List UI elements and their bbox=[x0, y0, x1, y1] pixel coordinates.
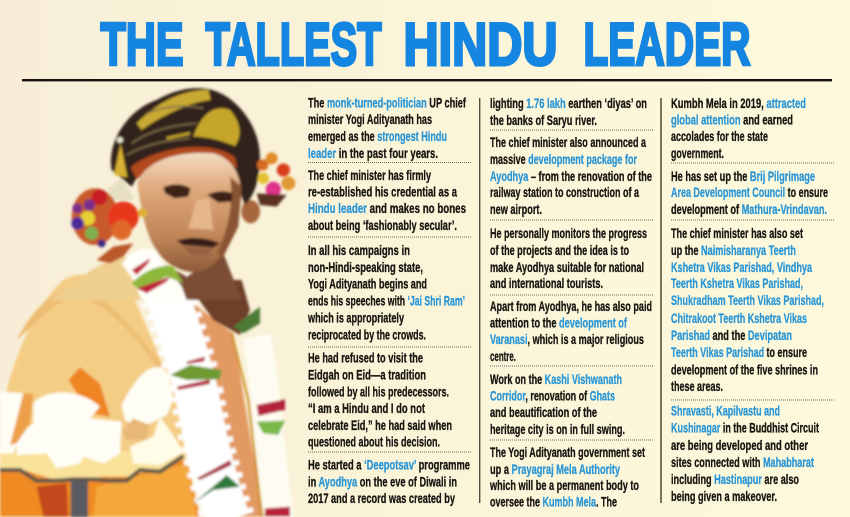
paragraph: Teerth Vikas Parishads: up the Naimisharanya Teerth bbox=[671, 243, 796, 258]
column dividers bbox=[479, 98, 662, 503]
brows and eyes bbox=[163, 184, 191, 198]
paragraph: Varanasi bbox=[490, 299, 652, 364]
paragraph: Jai Shri Ram: ends his speeches with ‘Jai Shri Ram’ bbox=[308, 294, 465, 308]
title: TALLEST bbox=[206, 11, 382, 78]
text column 2 bbox=[489, 96, 654, 510]
paragraph: Jai Shri Ram: Yogi Adityanath begins and bbox=[308, 276, 427, 292]
paragraph: development package: new airport. bbox=[490, 202, 542, 217]
face bbox=[137, 153, 241, 272]
paragraph: development package: Ayodhya – from the renovation of the bbox=[490, 169, 652, 184]
shoulder bbox=[50, 257, 187, 300]
paragraph: Eidgah on Eid: celebrate Eid,” he had said when bbox=[308, 418, 452, 433]
paragraph: Varanasi: Varanasi, which is a major religious bbox=[490, 332, 644, 347]
paragraph: Brij Pilgrimage council bbox=[671, 169, 828, 217]
photo: Yogi Adityanath in saffron robes with garlands and lamps bbox=[0, 88, 295, 517]
right garland bbox=[257, 337, 280, 517]
paragraph: Deepotsav programme: in Ayodhya on the eve of Diwali in bbox=[308, 474, 457, 490]
turban bbox=[111, 88, 260, 205]
paragraph: monitors progress: He personally monitors the progress bbox=[490, 226, 647, 241]
turban band bbox=[131, 147, 237, 179]
title: LEADER bbox=[584, 11, 750, 78]
paragraph: Teerth Vikas Parishads: these areas. bbox=[671, 379, 723, 394]
neck bbox=[147, 240, 242, 300]
paragraph: Varanasi: Apart from Ayodhya, he has also paid bbox=[490, 299, 652, 314]
paragraph: Eidgah on Eid: questioned about his decision. bbox=[308, 434, 440, 450]
left pompom cluster bbox=[108, 178, 135, 200]
title: THE bbox=[100, 11, 184, 78]
paragraph: Jai Shri Ram: non-Hindi-speaking state, bbox=[308, 260, 423, 275]
paragraph: Varanasi: centre. bbox=[490, 349, 516, 364]
paragraph: Buddhist Circuit: including Hastinapur are also bbox=[671, 472, 799, 487]
lamp tray bbox=[0, 450, 183, 480]
paragraph: strongest Hindu leader bbox=[308, 96, 466, 161]
paragraph: credential as a Hindu leader: about being ‘fashionably secular’. bbox=[308, 218, 457, 233]
paragraph: Kumbh Mela 2019 bbox=[671, 96, 806, 161]
lower robe and garlands bbox=[0, 275, 290, 517]
paragraph: Deepotsav programme: 2017 and a record was created by bbox=[308, 491, 455, 506]
paragraph: Varanasi: attention to the development of bbox=[490, 316, 627, 330]
paragraph: Kashi Vishwanath Corridor: heritage city is on in full swing. bbox=[490, 422, 625, 437]
paragraph: Kashi Vishwanath Corridor: and beautification of the bbox=[490, 405, 597, 420]
paragraph: Jai Shri Ram bbox=[307, 243, 465, 342]
text column 3 bbox=[671, 96, 835, 504]
paragraph: Eidgah on Eid: followed by all his predecessors. bbox=[308, 384, 449, 400]
yellow tassel bbox=[114, 143, 127, 177]
paragraph: Deepotsav programme: He started a ‘Deepotsav’ programme bbox=[308, 458, 470, 472]
paragraph: credential as a Hindu leader: re-established his credential as a bbox=[308, 184, 457, 200]
paragraph: Prayagraj Mela Authority bbox=[489, 445, 645, 510]
paragraph: diyas on Saryu bbox=[490, 96, 647, 128]
paragraph: Kumbh Mela 2019: global attention and earned bbox=[671, 112, 793, 128]
paragraph: monitors progress: make Ayodhya suitable for national bbox=[490, 260, 644, 275]
paragraph: Teerth Vikas Parishads bbox=[671, 226, 824, 394]
paragraph: credential as a Hindu leader bbox=[308, 168, 466, 233]
paragraph: Kumbh Mela 2019: accolades for the state bbox=[671, 129, 768, 144]
head, turban and pompoms bbox=[50, 88, 295, 300]
paragraph: Eidgah on Eid: Eidgah on Eid—a tradition bbox=[308, 368, 426, 382]
paragraph: Jai Shri Ram: reciprocated by the crowds. bbox=[308, 328, 426, 342]
paragraph: strongest Hindu leader: The monk-turned-politician UP chief bbox=[308, 96, 466, 110]
paragraph: development package: The chief minister also announced a bbox=[490, 135, 646, 150]
paragraph: monitors progress: and international tourists. bbox=[490, 276, 603, 291]
paragraph: Eidgah on Eid bbox=[308, 350, 452, 450]
paragraph: diyas on Saryu: lighting 1.76 lakh earthen ‘diyas’ on bbox=[490, 96, 647, 111]
paragraph: Deepotsav programme bbox=[308, 458, 470, 506]
paragraph: Brij Pilgrimage council: He has set up the Brij Pilgrimage bbox=[671, 169, 815, 184]
paragraph: Kashi Vishwanath Corridor: Work on the Kashi Vishwanath bbox=[490, 372, 622, 387]
title: HINDU bbox=[404, 11, 558, 78]
paragraph: monitors progress bbox=[490, 226, 647, 291]
paragraph: monitors progress: of the projects and the idea is to bbox=[490, 243, 629, 258]
paragraph: development package bbox=[490, 135, 652, 217]
paragraph: strongest Hindu leader: emerged as the strongest Hindu bbox=[308, 129, 447, 144]
paragraph: Teerth Vikas Parishads: Parishad and the Devipatan bbox=[671, 328, 792, 343]
paragraph: credential as a Hindu leader: The chief minister has firmly bbox=[308, 168, 431, 183]
paragraph: diyas on Saryu: the banks of Saryu river. bbox=[490, 113, 597, 128]
neck shadow bbox=[185, 280, 250, 335]
left garland bbox=[163, 283, 228, 517]
paragraph: Brij Pilgrimage council: Area Development Council to ensure bbox=[671, 185, 828, 200]
heading rule bbox=[22, 79, 832, 81]
paragraph: Jai Shri Ram: which is appropriately bbox=[307, 310, 404, 326]
paragraph: Buddhist Circuit bbox=[671, 404, 819, 504]
paragraph: credential as a Hindu leader: Hindu leader and makes no bones bbox=[308, 201, 466, 216]
paragraph: Teerth Vikas Parishads: Teerth Vikas Parishad to ensure bbox=[671, 345, 807, 360]
paragraph: strongest Hindu leader: leader in the past four years. bbox=[308, 146, 438, 161]
lamp flames bbox=[0, 392, 23, 453]
garland top bbox=[122, 249, 187, 300]
paragraph: development package: railway station to construction of a bbox=[490, 185, 639, 200]
text column 1 bbox=[307, 96, 471, 506]
right pompom cluster bbox=[266, 152, 278, 164]
paragraph: strongest Hindu leader: minister Yogi Adityanath has bbox=[308, 112, 432, 127]
paragraph: Eidgah on Eid: He had refused to visit the bbox=[308, 350, 423, 366]
paragraph: Buddhist Circuit: sites connected with Mahabharat bbox=[671, 455, 814, 470]
title bbox=[100, 11, 750, 78]
paragraph: Jai Shri Ram: In all his campaigns in bbox=[308, 243, 410, 258]
paragraph: Kumbh Mela 2019: Kumbh Mela in 2019, attracted bbox=[671, 96, 806, 111]
paragraph: Prayagraj Mela Authority: which will be a permanent body to bbox=[489, 478, 639, 493]
paragraph: Buddhist Circuit: Shravasti, Kapilvastu and bbox=[671, 404, 780, 418]
paragraph: development package: massive development package for bbox=[490, 152, 637, 167]
paragraph: Prayagraj Mela Authority: The Yogi Adityanath government set bbox=[490, 445, 645, 460]
paragraph: Buddhist Circuit: being given a makeover. bbox=[671, 489, 777, 504]
inner garment bbox=[188, 300, 263, 517]
paragraph: Kumbh Mela 2019: government. bbox=[671, 146, 724, 161]
paragraph: Kashi Vishwanath Corridor: Corridor, renovation of Ghats bbox=[490, 388, 615, 404]
paragraph: Prayagraj Mela Authority: up a Prayagraj Mela Authority bbox=[490, 462, 620, 477]
paragraph: Eidgah on Eid: “I am a Hindu and I do not bbox=[308, 401, 425, 416]
paragraph: Prayagraj Mela Authority: oversee the Kumbh Mela. The bbox=[490, 494, 617, 510]
right ear bbox=[241, 200, 260, 223]
paragraph: Kashi Vishwanath Corridor bbox=[490, 372, 625, 437]
